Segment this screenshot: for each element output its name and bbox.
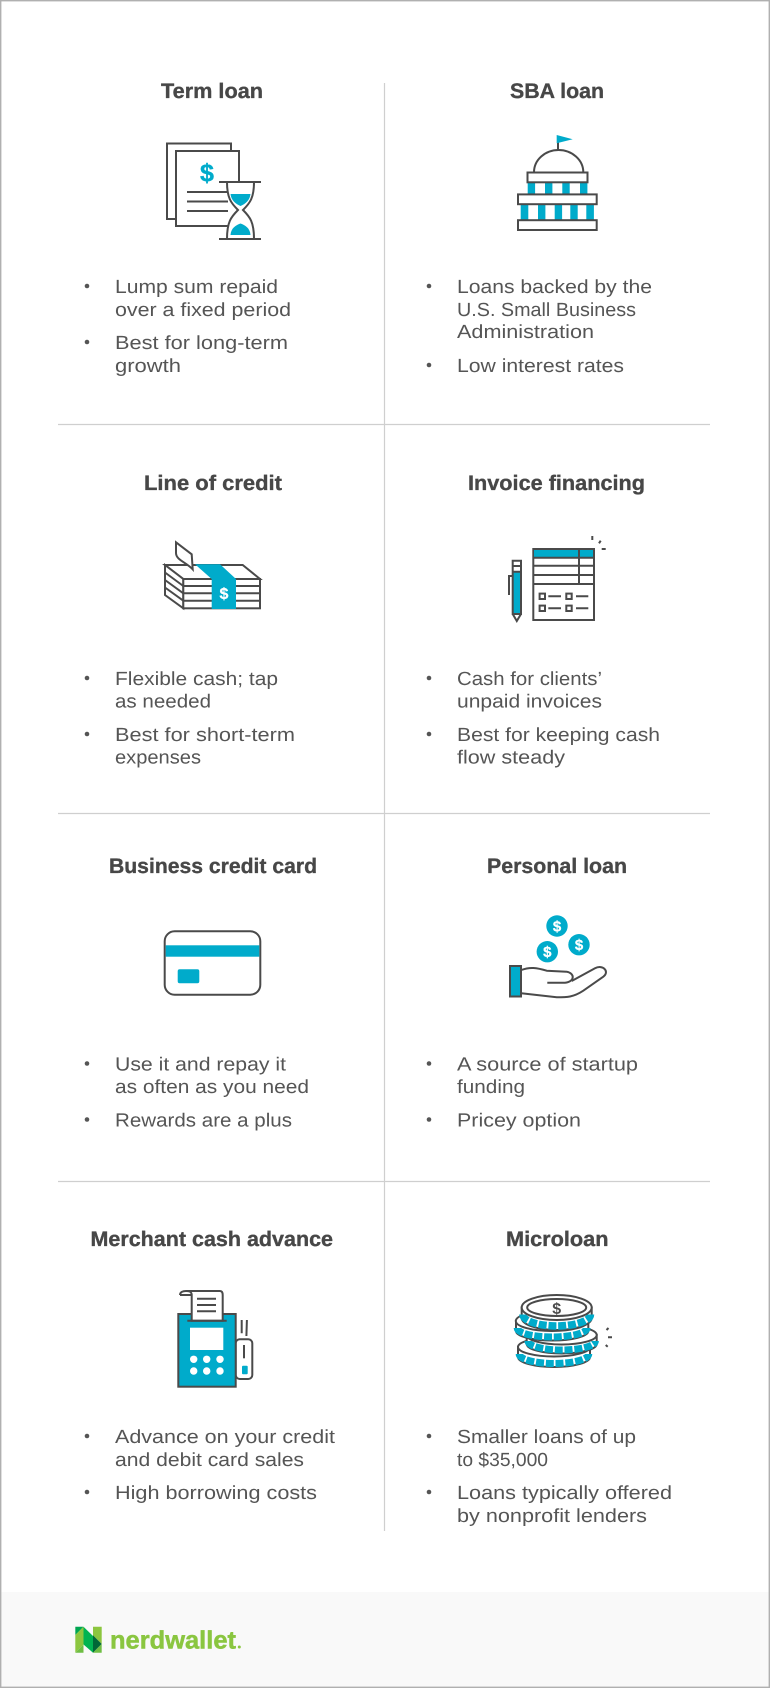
bullet list: microloan: to $35,000 bbox=[457, 1450, 548, 1471]
icon: card terminal bbox=[178, 1291, 252, 1387]
icon: hand with coins: $ bbox=[575, 937, 584, 954]
panel: term loan bbox=[85, 80, 291, 377]
bullet list: invoice financing: Cash for clients’ bbox=[457, 669, 602, 690]
icon: invoice and pen bbox=[509, 536, 606, 621]
bullet list: invoice financing: Best for keeping cash bbox=[457, 725, 660, 746]
icon: stack of cash bbox=[165, 542, 260, 609]
panel: microloan bbox=[427, 1228, 672, 1527]
icon: hand with coins: $ bbox=[543, 944, 552, 961]
panel: line of credit bbox=[85, 472, 295, 768]
heading: personal loan: Personal loan bbox=[487, 855, 627, 878]
bullet list: SBA loan: Administration bbox=[457, 322, 594, 343]
bullet list: business credit card bbox=[85, 1054, 309, 1132]
heading: term loan: Term loan bbox=[161, 80, 263, 103]
icon: stack of coins: $ bbox=[552, 1301, 561, 1318]
bullet list: SBA loan: Low interest rates bbox=[457, 356, 624, 377]
icon: documents and hourglass: $ bbox=[200, 160, 214, 188]
bullet list: business credit card: Use it and repay it bbox=[115, 1054, 287, 1076]
bullet list: personal loan: A source of startup bbox=[457, 1054, 638, 1076]
bullet list: line of credit: Best for short-term bbox=[115, 725, 295, 746]
bullet list: merchant cash advance: and debit card sales bbox=[115, 1450, 304, 1471]
bullet list: microloan bbox=[427, 1427, 672, 1527]
icon: stack of coins bbox=[516, 1295, 612, 1367]
heading: invoice financing: Invoice financing bbox=[468, 472, 645, 495]
bullet list: business credit card: as often as you need bbox=[115, 1077, 309, 1098]
heading: business credit card: Business credit card bbox=[109, 855, 317, 878]
bullet list: term loan: over a fixed period bbox=[115, 300, 291, 321]
bullet list: invoice financing: flow steady bbox=[457, 748, 566, 768]
heading: SBA loan: SBA loan bbox=[510, 80, 604, 103]
heading: microloan: Microloan bbox=[506, 1228, 608, 1251]
bullet list: line of credit: Flexible cash; tap bbox=[115, 669, 278, 690]
panel: merchant cash advance bbox=[85, 1228, 336, 1504]
wordmark: nerdwallet bbox=[110, 1626, 237, 1654]
heading: merchant cash advance: Merchant cash advance bbox=[90, 1228, 333, 1251]
panel: business credit card bbox=[85, 855, 317, 1132]
panel: personal loan bbox=[427, 855, 638, 1132]
bullet list: microloan: Smaller loans of up bbox=[457, 1427, 636, 1448]
bullet list: line of credit: as needed bbox=[115, 692, 211, 712]
icon: stack of cash: $ bbox=[220, 586, 229, 603]
bullet list: line of credit bbox=[85, 669, 295, 768]
bullet list: line of credit: expenses bbox=[115, 748, 201, 768]
bullet list: personal loan bbox=[427, 1054, 638, 1132]
bullet list: SBA loan: U.S. Small Business bbox=[457, 300, 636, 321]
bullet list: invoice financing bbox=[427, 669, 660, 768]
icon: capitol building bbox=[518, 135, 597, 230]
heading: line of credit: Line of credit bbox=[144, 472, 282, 495]
bullet list: merchant cash advance: Advance on your credit bbox=[115, 1427, 336, 1448]
footer logo: nerdwallet bbox=[75, 1626, 241, 1654]
icon: N mark bbox=[75, 1627, 102, 1653]
bullet list: SBA loan bbox=[427, 277, 652, 377]
bullet list: microloan: Loans typically offered bbox=[457, 1483, 672, 1504]
bullet list: term loan bbox=[85, 277, 291, 377]
bullet list: invoice financing: unpaid invoices bbox=[457, 692, 602, 712]
bullet list: business credit card: Rewards are a plus bbox=[115, 1110, 292, 1132]
icon: credit card bbox=[165, 931, 260, 995]
bullet list: term loan: Lump sum repaid bbox=[115, 277, 278, 298]
bullet list: term loan: growth bbox=[115, 356, 181, 377]
icon: hand with coins bbox=[510, 915, 606, 997]
panel: invoice financing bbox=[427, 472, 660, 768]
icon: hand with coins: $ bbox=[553, 918, 562, 936]
bullet list: SBA loan: Loans backed by the bbox=[457, 277, 652, 298]
bullet list: merchant cash advance: High borrowing costs bbox=[115, 1483, 317, 1504]
bullet list: term loan: Best for long-term bbox=[115, 333, 288, 354]
panel: SBA loan bbox=[427, 80, 652, 377]
bullet list: personal loan: funding bbox=[457, 1077, 525, 1098]
bullet list: personal loan: Pricey option bbox=[457, 1110, 581, 1132]
bullet list: merchant cash advance bbox=[85, 1427, 336, 1504]
bullet list: microloan: by nonprofit lenders bbox=[457, 1506, 647, 1527]
icon: documents and hourglass bbox=[167, 144, 261, 239]
